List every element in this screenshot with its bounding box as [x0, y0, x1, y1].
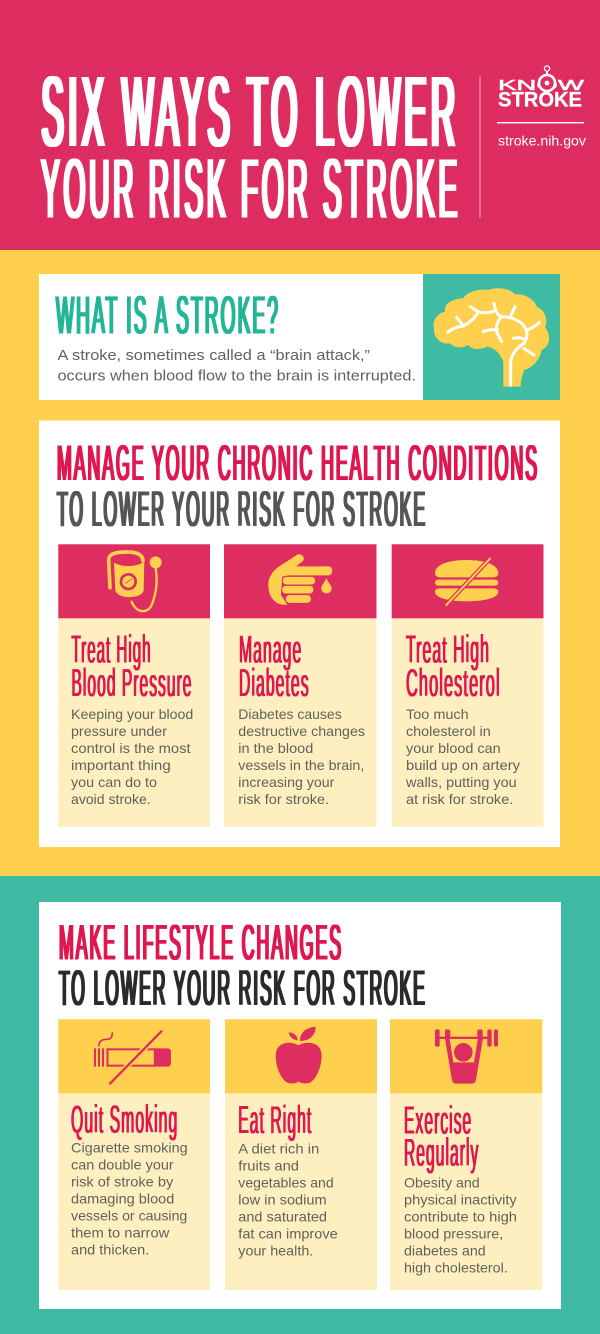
- card text: Obesity and: [404, 1174, 480, 1190]
- icon: brain: [434, 288, 549, 387]
- card text: vegetables and: [238, 1174, 334, 1190]
- card text: walls, putting you: [405, 774, 517, 790]
- brain tile: [423, 274, 560, 400]
- card: exercise regularly: [390, 1019, 542, 1290]
- card text: risk of stroke by: [71, 1174, 173, 1190]
- icon: apple: [276, 1027, 322, 1084]
- card text: [71, 1140, 188, 1258]
- card text: Keeping your blood: [71, 706, 193, 722]
- card text: your blood can: [406, 740, 501, 756]
- card text: Cigarette smoking: [71, 1140, 188, 1156]
- card: exercise regularly: Exercise: [404, 1099, 472, 1142]
- card text: avoid stroke.: [71, 791, 151, 807]
- card text: fat can improve: [238, 1226, 338, 1242]
- Know Stroke logo: [498, 66, 586, 112]
- title: [41, 56, 461, 236]
- card: treat high blood pressure: [58, 544, 210, 827]
- card text: A diet rich in: [238, 1140, 319, 1156]
- card text: [405, 706, 520, 807]
- Know Stroke logo: KNOW: [498, 77, 586, 94]
- card heading: [239, 629, 310, 705]
- card: eat right: [225, 1019, 377, 1290]
- card: manage diabetes: [224, 544, 376, 827]
- card text: control is the most: [71, 740, 191, 756]
- definition text: occurs when blood flow to the brain is interrupted.: [58, 368, 416, 384]
- card text: risk for stroke.: [238, 791, 329, 807]
- card text: can double your: [71, 1157, 174, 1173]
- card text: in the blood: [238, 740, 313, 756]
- card text: high cholesterol.: [404, 1259, 508, 1275]
- card text: destructive changes: [238, 723, 365, 739]
- card: manage diabetes: Manage: [239, 629, 302, 672]
- card text: [404, 1174, 517, 1275]
- icon: crossed out burger: [435, 558, 498, 606]
- card text: them to narrow: [71, 1225, 170, 1241]
- header divider: [480, 76, 481, 218]
- card: exercise regularly: Regularly: [404, 1132, 479, 1175]
- card text: [238, 706, 365, 807]
- Know Stroke logo: STROKE: [498, 88, 582, 112]
- icon: crossed out cigarette: [94, 1031, 171, 1084]
- icon: hand with blood drop: [268, 554, 332, 605]
- card text: build up on artery: [406, 757, 520, 773]
- card text: and saturated: [238, 1208, 327, 1224]
- card text: important thing: [71, 757, 171, 773]
- panel: what is a stroke: [39, 274, 560, 400]
- card text: diabetes and: [404, 1242, 486, 1258]
- card: quit smoking: [58, 1019, 210, 1290]
- card text: low in sodium: [238, 1192, 327, 1208]
- website: stroke.nih.gov: [498, 132, 586, 148]
- card text: physical inactivity: [404, 1191, 517, 1207]
- card: quit smoking: Quit Smoking: [71, 1099, 178, 1142]
- card text: cholesterol in: [406, 723, 491, 739]
- card text: blood pressure,: [404, 1225, 503, 1241]
- card heading: [404, 1099, 479, 1175]
- header band: [0, 0, 600, 250]
- card text: you can do to: [71, 774, 157, 790]
- card: manage diabetes: Diabetes: [239, 662, 310, 705]
- card text: increasing your: [238, 774, 335, 790]
- card text: vessels or causing: [71, 1208, 187, 1224]
- card text: [238, 1140, 338, 1258]
- card text: damaging blood: [71, 1191, 174, 1207]
- panel: lifestyle changes: [39, 902, 561, 1309]
- icon: blood pressure cuff: [109, 552, 162, 611]
- card: eat right: Eat Right: [238, 1099, 312, 1142]
- card text: at risk for stroke.: [406, 791, 513, 807]
- icon: person lifting weights: [435, 1029, 498, 1084]
- card text: and thicken.: [71, 1242, 149, 1258]
- card text: your health.: [238, 1242, 313, 1258]
- definition text: [58, 348, 416, 384]
- card text: Too much: [406, 706, 469, 722]
- card text: Diabetes causes: [238, 706, 342, 722]
- panel: manage chronic conditions: [39, 420, 560, 847]
- card heading: Treat High: [72, 629, 152, 672]
- card text: fruits and: [238, 1158, 299, 1174]
- logo rule: [497, 122, 584, 123]
- card text: pressure under: [71, 723, 167, 739]
- yellow section background: [0, 250, 600, 876]
- card text: contribute to high: [404, 1208, 517, 1224]
- definition text: A stroke, sometimes called a “brain attack,”: [58, 348, 370, 364]
- teal section background: [0, 876, 600, 1334]
- card heading: [406, 629, 501, 705]
- card text: vessels in the brain,: [238, 757, 364, 773]
- card: treat high cholesterol: [392, 544, 544, 827]
- card text: [71, 706, 193, 807]
- card heading: [72, 629, 192, 705]
- panel: manage chronic conditions: Blood Pressure: [72, 662, 192, 705]
